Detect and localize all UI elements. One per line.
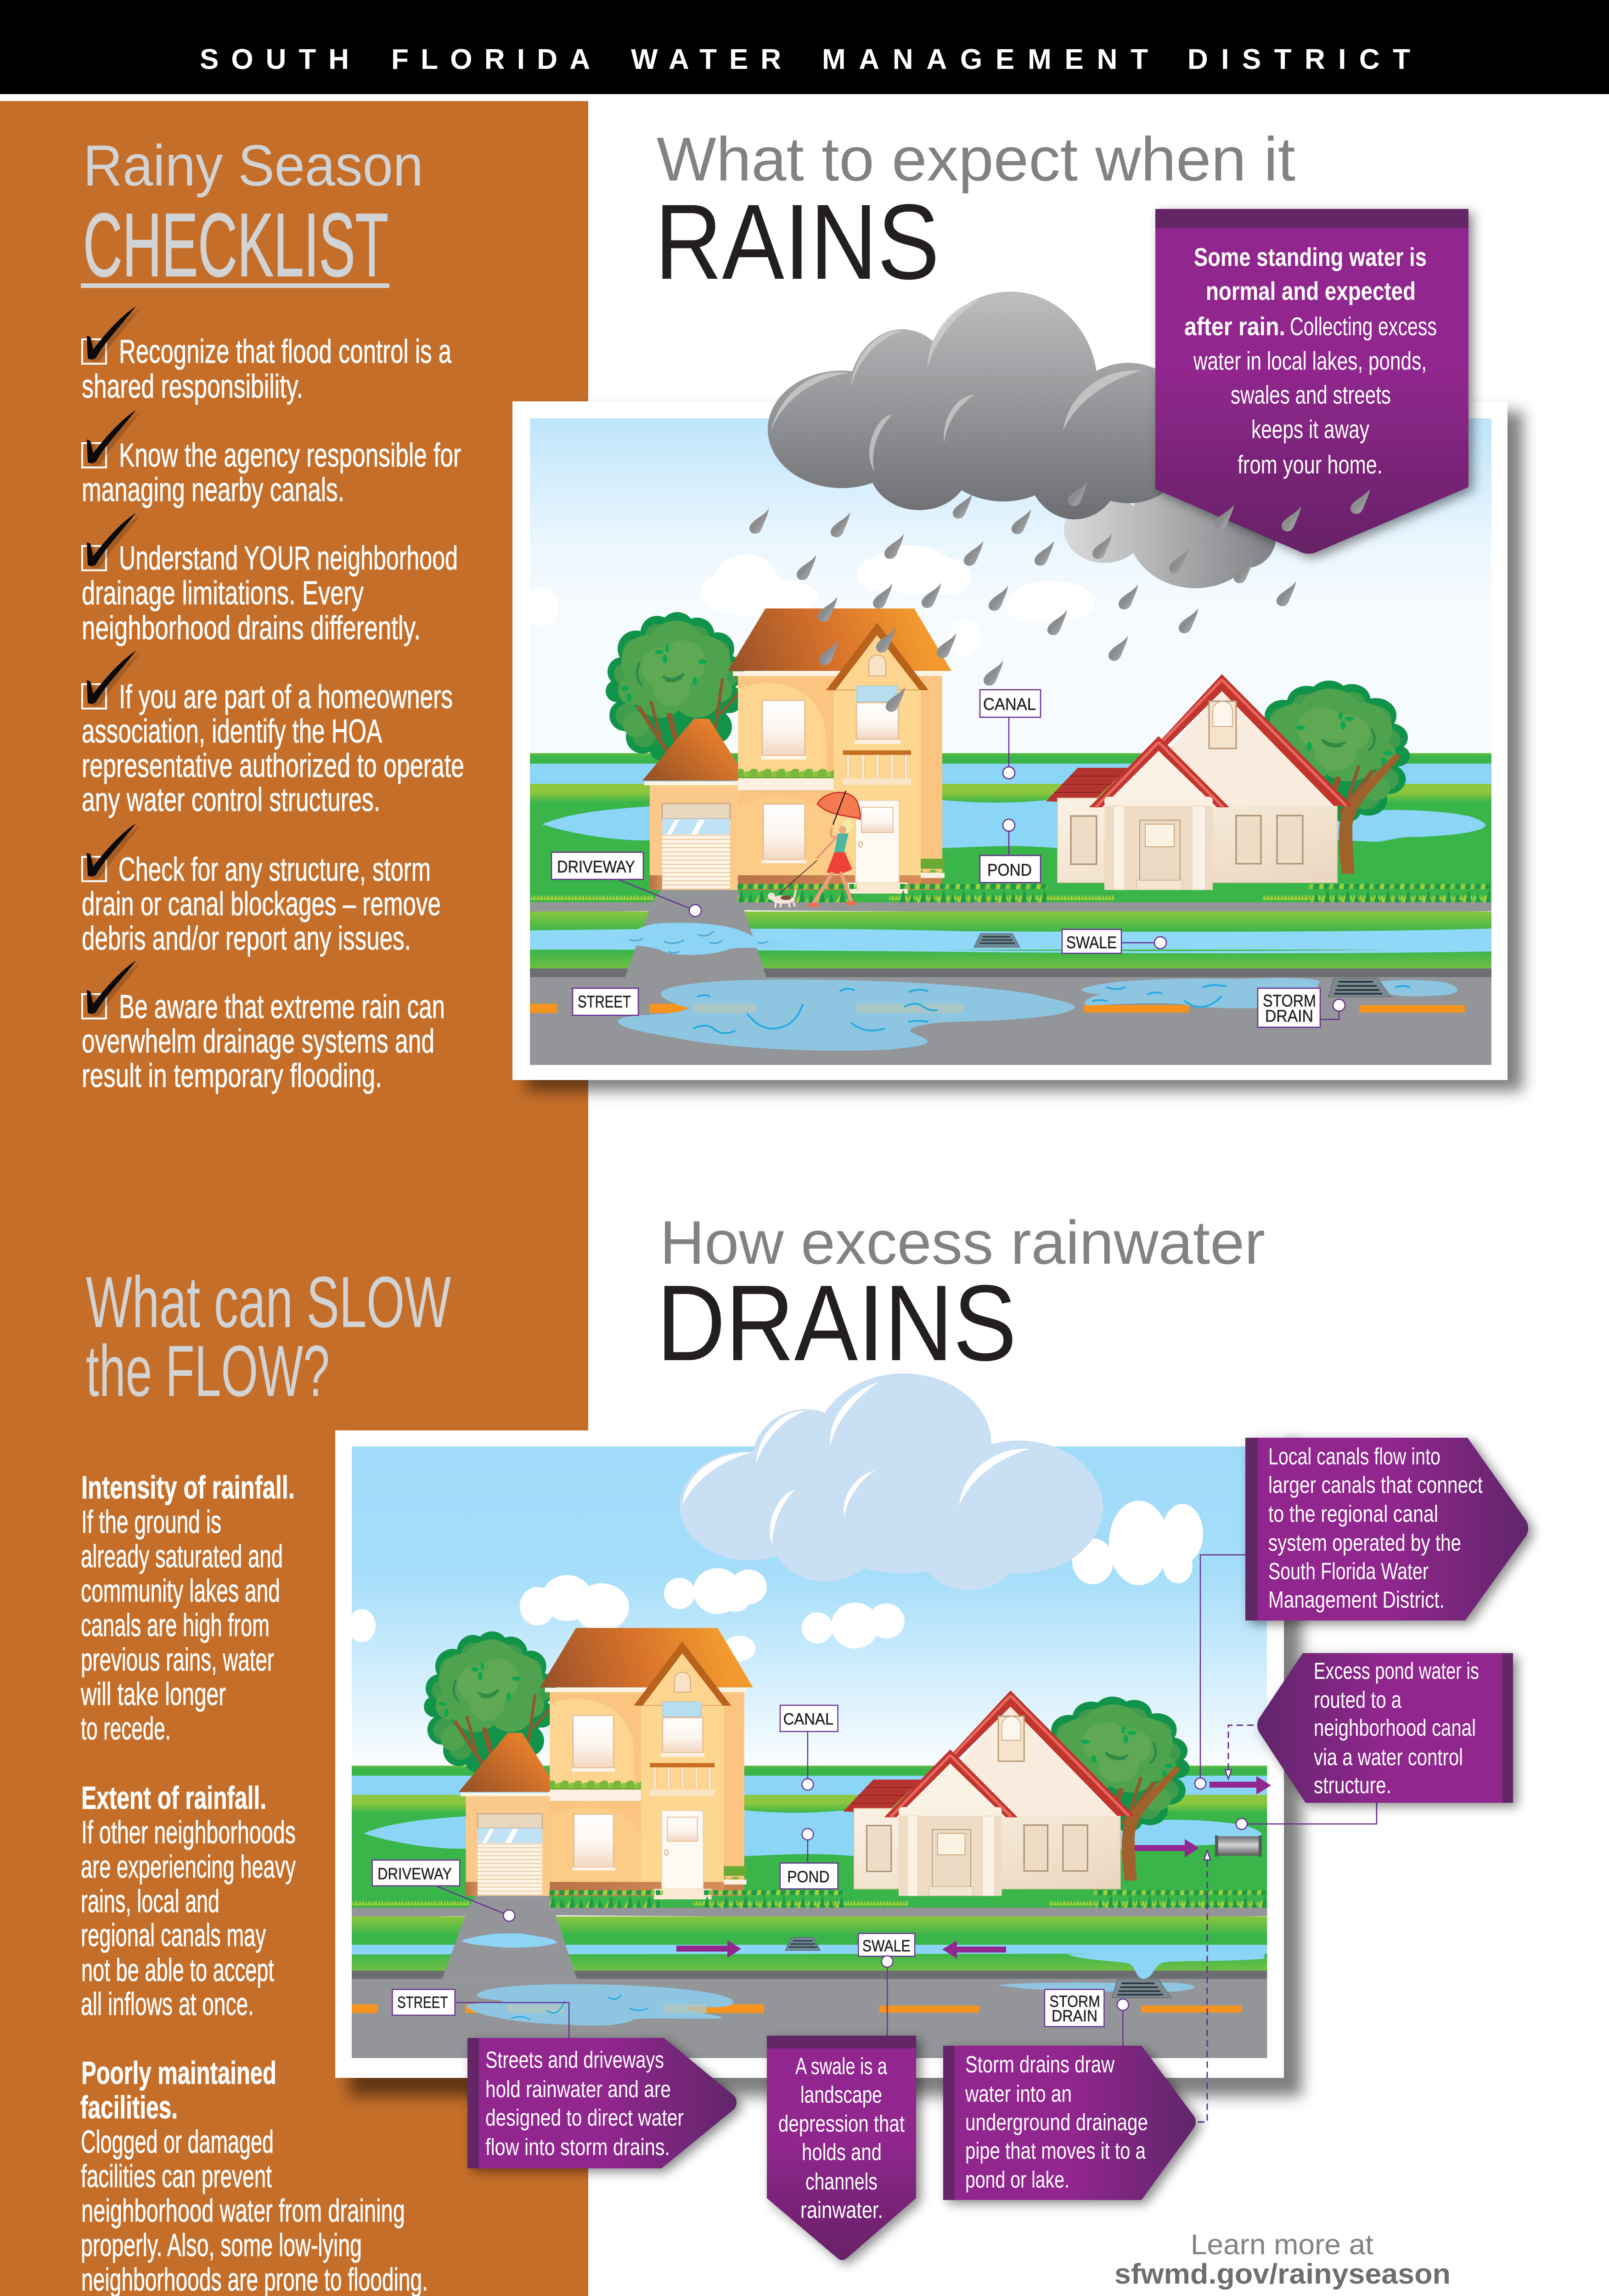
callout: excess pond water: routed to a bbox=[1314, 1687, 1401, 1713]
item: extreme rain: Be aware that extreme rain can bbox=[119, 989, 445, 1025]
factor: intensity of rainfall: canals are high from bbox=[81, 1607, 270, 1643]
factor: poorly maintained facilities: facilities. bbox=[80, 2089, 178, 2125]
factor: intensity of rainfall: community lakes and bbox=[81, 1573, 280, 1609]
factor: intensity of rainfall bbox=[80, 1469, 295, 1746]
callout: storm drains: underground drainage bbox=[965, 2109, 1148, 2135]
item: blockages: debris and/or report any issues. bbox=[82, 920, 411, 957]
heading: what can slow the flow: What can SLOW bbox=[86, 1262, 451, 1343]
callout: streets and driveways bbox=[467, 2038, 737, 2168]
street labels: SWALE bbox=[862, 1937, 911, 1955]
callout: a swale bbox=[767, 2036, 916, 2260]
frame shadow bbox=[349, 1444, 1302, 2096]
item: agency: managing nearby canals. bbox=[82, 472, 344, 508]
photo frame bbox=[335, 1430, 1284, 2078]
callout: standing water: normal and expected bbox=[1206, 276, 1416, 305]
drainage pipe bbox=[1215, 1835, 1262, 1857]
factor: extent of rainfall: all inflows at once. bbox=[81, 1986, 254, 2022]
street labels: DRIVEWAY bbox=[377, 1865, 452, 1883]
item: shared responsibility: shared responsibility. bbox=[82, 368, 303, 405]
street labels: STORM bbox=[1263, 991, 1316, 1010]
item: drainage limitations: Understand YOUR neighborhood bbox=[119, 540, 458, 577]
big house bbox=[606, 608, 951, 894]
callout: a swale: rainwater. bbox=[800, 2197, 883, 2223]
callout: excess pond water bbox=[1257, 1653, 1513, 1803]
callout: excess pond water: neighborhood canal bbox=[1314, 1715, 1476, 1741]
item: agency bbox=[82, 410, 461, 508]
item: extreme rain: result in temporary flooding. bbox=[82, 1058, 382, 1094]
callout: standing water: water in local lakes, ponds, bbox=[1193, 346, 1427, 375]
photo frame bbox=[512, 401, 1508, 1080]
checklist items bbox=[82, 306, 464, 1094]
factor: intensity of rainfall: will take longer bbox=[80, 1676, 226, 1712]
factor: poorly maintained facilities: Clogged or damaged bbox=[81, 2124, 274, 2160]
item: HOA: any water control structures. bbox=[82, 782, 380, 818]
street labels: STREET bbox=[578, 992, 631, 1011]
callout: a swale: depression that bbox=[778, 2110, 905, 2137]
street labels: DRIVEWAY bbox=[557, 857, 635, 876]
woman with umbrella and dog bbox=[768, 791, 860, 908]
footer: learn more: sfwmd.gov/rainyseason bbox=[1114, 2258, 1451, 2290]
street labels: DRAIN bbox=[1265, 1007, 1313, 1025]
text block: slow the flow factors bbox=[80, 1469, 428, 2296]
item: HOA: representative authorized to operate bbox=[82, 748, 464, 784]
heading: what to expect when it rains: RAINS bbox=[655, 182, 940, 302]
street labels: POND bbox=[987, 861, 1032, 879]
header bar: DISTRICT bbox=[1187, 44, 1410, 75]
callout: excess pond water: Excess pond water is bbox=[1314, 1658, 1479, 1684]
callout: standing water: Some standing water is bbox=[1194, 242, 1427, 271]
header bar: SOUTH bbox=[200, 44, 349, 75]
footer: learn more bbox=[1114, 2229, 1451, 2290]
driveway bbox=[625, 889, 766, 977]
factor: extent of rainfall: Extent of rainfall. bbox=[81, 1780, 266, 1816]
callout: streets and driveways: hold rainwater and are bbox=[485, 2076, 671, 2102]
factor: intensity of rainfall: If the ground is bbox=[81, 1504, 221, 1540]
item: blockages: Check for any structure, storm bbox=[118, 851, 431, 888]
item: drainage limitations: neighborhood drains differently. bbox=[82, 610, 421, 647]
factor: extent of rainfall: rains, local and bbox=[81, 1883, 219, 1919]
street labels: POND bbox=[787, 1868, 830, 1886]
callout: streets and driveways: Streets and driveways bbox=[485, 2047, 664, 2073]
callout: excess pond water: via a water control bbox=[1314, 1744, 1463, 1770]
callout: storm drains: pipe that moves it to a bbox=[965, 2138, 1146, 2164]
title: rainy season checklist: CHECKLIST bbox=[83, 195, 388, 295]
callout: storm drains: water into an bbox=[965, 2081, 1072, 2107]
ground and water bbox=[352, 1766, 1267, 2062]
callout: local canals bbox=[1245, 1438, 1528, 1621]
scene: ground, houses and labels bbox=[352, 1628, 1267, 2062]
item: agency: Know the agency responsible for bbox=[119, 437, 461, 474]
item: blockages: drain or canal blockages – remove bbox=[82, 886, 441, 923]
item: extreme rain bbox=[82, 961, 445, 1094]
item: HOA: association, identify the HOA bbox=[82, 713, 382, 750]
callout: a swale: landscape bbox=[800, 2082, 882, 2108]
callout: local canals: to the regional canal bbox=[1268, 1501, 1438, 1527]
factor: extent of rainfall: regional canals may bbox=[81, 1917, 266, 1953]
callout: standing water: keeps it away bbox=[1251, 415, 1369, 444]
item: blockages bbox=[82, 823, 441, 957]
street markings bbox=[530, 1004, 1465, 1013]
small house bbox=[843, 1690, 1190, 1896]
footer: learn more: Learn more at bbox=[1191, 2229, 1373, 2261]
ground and water bbox=[530, 753, 1491, 1065]
connector lines bbox=[1195, 1555, 1377, 2122]
callout: a swale: A swale is a bbox=[795, 2053, 887, 2079]
factor: poorly maintained facilities bbox=[80, 2055, 428, 2296]
callout: excess pond water: structure. bbox=[1314, 1772, 1391, 1798]
title: rainy season checklist: Rainy Season bbox=[83, 133, 423, 198]
white clouds bbox=[348, 1501, 1203, 1661]
flow arrows bbox=[676, 1776, 1271, 1958]
callout: local canals: Management District. bbox=[1268, 1587, 1445, 1613]
factor: poorly maintained facilities: neighborhood water from draining bbox=[81, 2193, 405, 2228]
street labels: DRAIN bbox=[1052, 2007, 1097, 2025]
sidewalk bbox=[530, 902, 1491, 914]
factor: intensity of rainfall: already saturated and bbox=[81, 1538, 283, 1574]
pale cloud bbox=[680, 1373, 1103, 1590]
header bar: FLORIDA bbox=[391, 44, 590, 75]
driveway puddle bbox=[613, 923, 788, 955]
callout: streets and driveways: designed to direct water bbox=[485, 2105, 684, 2131]
street puddles bbox=[618, 979, 1075, 1051]
street bbox=[530, 977, 1491, 1065]
factor: poorly maintained facilities: Poorly maintained bbox=[81, 2055, 276, 2091]
swale grate bbox=[974, 934, 1020, 947]
raindrops bbox=[749, 481, 1370, 712]
callout: a swale: channels bbox=[805, 2168, 878, 2195]
street labels: STORM bbox=[1049, 1992, 1100, 2010]
front storm cloud bbox=[768, 292, 1196, 519]
callout: local canals: South Florida Water bbox=[1268, 1558, 1429, 1584]
frame shadow bbox=[526, 411, 1523, 1091]
callout: a swale: holds and bbox=[802, 2139, 882, 2165]
heading: how excess rainwater drains: DRAINS bbox=[657, 1262, 1017, 1383]
big house bbox=[424, 1628, 753, 1899]
callout: storm drains bbox=[943, 2046, 1196, 2200]
header bar: MANAGEMENT bbox=[822, 44, 1148, 75]
factor: extent of rainfall: If other neighborhoods bbox=[81, 1814, 296, 1850]
sky bbox=[352, 1446, 1267, 2058]
callout: standing water: after rain. bbox=[1184, 312, 1285, 341]
item: shared responsibility: Recognize that flood control is a bbox=[119, 333, 452, 370]
heading: what to expect when it rains: What to expect when it bbox=[657, 124, 1295, 194]
heading: how excess rainwater drains bbox=[657, 1209, 1265, 1383]
factor: extent of rainfall: not be able to accept bbox=[81, 1952, 274, 1988]
panel: orange sidebar bbox=[0, 101, 588, 2296]
callout: standing water: swales and streets bbox=[1231, 380, 1391, 409]
panel: rain illustration bbox=[512, 401, 1523, 1091]
callout: local canals: system operated by the bbox=[1268, 1530, 1461, 1556]
lawn grass bbox=[531, 895, 654, 903]
heading: what can slow the flow: the FLOW? bbox=[86, 1331, 330, 1412]
connector nodes bbox=[1195, 1770, 1247, 1860]
street labels: CANAL bbox=[983, 695, 1036, 714]
callout: standing water: from your home. bbox=[1238, 450, 1383, 479]
swale bbox=[530, 929, 1491, 951]
header bar bbox=[0, 0, 1609, 94]
factor: intensity of rainfall: Intensity of rainfall. bbox=[81, 1469, 295, 1505]
street labels bbox=[372, 1705, 1129, 2046]
header bar: WATER bbox=[631, 44, 781, 75]
small house bbox=[1046, 674, 1410, 890]
callout: storm drains: pond or lake. bbox=[965, 2167, 1069, 2193]
factor: poorly maintained facilities: properly. Also, some low-lying bbox=[81, 2227, 362, 2263]
street labels: SWALE bbox=[1066, 933, 1117, 952]
street labels: STREET bbox=[397, 1993, 448, 2011]
callout: storm drains: Storm drains draw bbox=[965, 2051, 1114, 2077]
item: drainage limitations: drainage limitations. Every bbox=[82, 575, 364, 612]
callout: streets and driveways: flow into storm drains. bbox=[485, 2134, 670, 2160]
storm grate bbox=[1328, 978, 1391, 997]
factor: poorly maintained facilities: facilities can prevent bbox=[81, 2158, 272, 2194]
shrubs bbox=[737, 884, 1490, 902]
item: HOA bbox=[82, 651, 464, 818]
item: HOA: If you are part of a homeowners bbox=[119, 679, 453, 715]
heading: what can slow the flow bbox=[86, 1262, 451, 1412]
factor: extent of rainfall bbox=[81, 1780, 296, 2022]
heading: how excess rainwater drains: How excess rainwater bbox=[660, 1209, 1265, 1277]
callout: local canals: larger canals that connect bbox=[1268, 1472, 1483, 1498]
street labels bbox=[551, 690, 1345, 1027]
rear storm cloud bbox=[1064, 471, 1276, 588]
item: extreme rain: overwhelm drainage systems and bbox=[82, 1023, 434, 1060]
factor: intensity of rainfall: to recede. bbox=[81, 1711, 171, 1746]
item: shared responsibility bbox=[82, 306, 452, 405]
factor: intensity of rainfall: previous rains, water bbox=[81, 1642, 274, 1677]
item: drainage limitations bbox=[82, 513, 458, 647]
callout: standing water bbox=[1155, 209, 1468, 554]
curb bbox=[530, 968, 1491, 977]
heading: what to expect when it rains bbox=[655, 124, 1295, 302]
callout: standing water: Collecting excess bbox=[1290, 312, 1437, 341]
title: rainy season checklist bbox=[81, 133, 423, 295]
street labels: CANAL bbox=[783, 1710, 833, 1728]
panel: drain illustration bbox=[335, 1373, 1528, 2290]
factor: extent of rainfall: are experiencing heavy bbox=[81, 1849, 296, 1885]
callout: local canals: Local canals flow into bbox=[1268, 1443, 1440, 1469]
sky bbox=[530, 418, 1491, 1065]
pond bbox=[542, 799, 1485, 849]
shrubs bbox=[549, 1890, 1266, 1908]
background clouds bbox=[523, 546, 1095, 657]
